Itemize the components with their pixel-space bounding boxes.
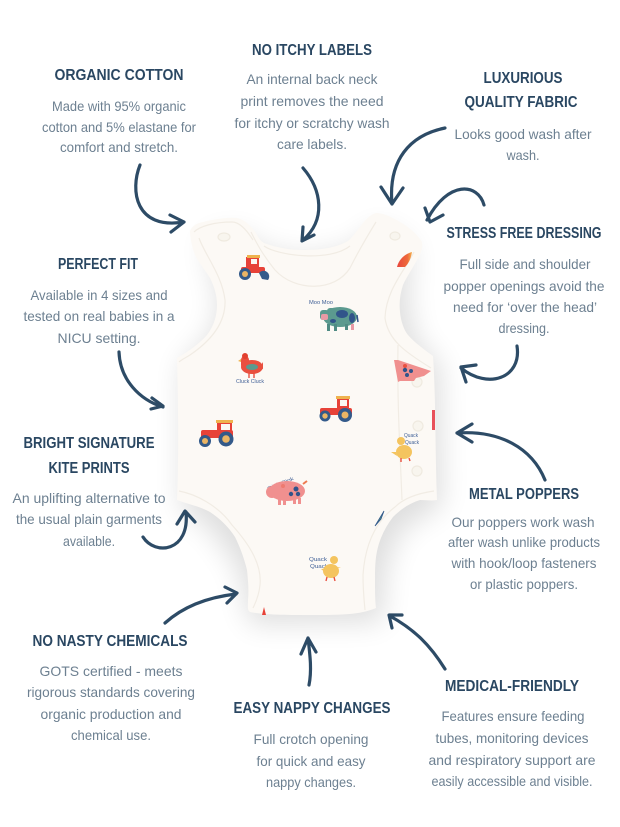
baby bodysuit garment: [177, 213, 442, 624]
block: no nasty chemicals: chemical use.: [71, 727, 151, 743]
arrow: stress free lower: [461, 346, 517, 382]
print: hen: Cluck Cluck: [236, 379, 265, 385]
block: luxurious quality fabric: QUALITY FABRIC: [464, 94, 578, 111]
block: medical-friendly: tubes, monitoring devices: [436, 730, 588, 746]
print: duck bottom: Quack: [309, 557, 328, 563]
block: no nasty chemicals: [27, 633, 195, 743]
print: duck right: Quack: [404, 433, 418, 439]
arrow: easy nappy changes: [301, 638, 316, 685]
print: cow: [309, 300, 358, 331]
block: organic cotton: ORGANIC COTTON: [54, 67, 184, 84]
block: metal poppers: or plastic poppers.: [470, 576, 578, 592]
block: metal poppers: after wash unlike products: [448, 534, 600, 550]
arrow: no itchy labels: [302, 168, 319, 241]
print: pig: Oink Oink: [267, 476, 295, 492]
print: tractor top left: [239, 255, 269, 280]
block: no nasty chemicals: GOTS certified - meets: [40, 663, 182, 679]
block: easy nappy changes: EASY NAPPY CHANGES: [234, 700, 391, 717]
block: metal poppers: Our poppers work wash: [452, 514, 594, 530]
block: medical-friendly: MEDICAL-FRIENDLY: [445, 678, 579, 695]
block: no itchy labels: NO ITCHY LABELS: [252, 42, 372, 59]
print: duck right: Quack: [405, 440, 419, 446]
print: kite edge right: [397, 252, 412, 267]
block: perfect fit: tested on real babies in a: [24, 308, 175, 324]
block: luxurious quality fabric: [454, 70, 592, 163]
block: organic cotton: Made with 95% organic: [52, 98, 186, 114]
block: organic cotton: cotton and 5% elastane for: [42, 119, 196, 135]
block: medical-friendly: [428, 678, 596, 789]
popper snaps: [218, 232, 423, 476]
block: bright signature kite prints: BRIGHT SIGNATURE: [24, 435, 155, 452]
arrow: perfect fit: [119, 352, 163, 409]
block: perfect fit: [24, 256, 175, 346]
block: medical-friendly: and respiratory support are: [428, 752, 596, 768]
block: stress free dressing: popper openings avoid the: [444, 278, 605, 294]
print: duck bottom: [309, 556, 341, 581]
block: no itchy labels: print removes the need: [240, 93, 384, 109]
arrow: organic cotton: [136, 165, 184, 232]
print: cow: Moo Moo: [309, 300, 333, 306]
block: no itchy labels: [234, 42, 390, 152]
print: duck right: [391, 433, 419, 462]
block: luxurious quality fabric: wash.: [506, 147, 540, 163]
block: easy nappy changes: Full crotch opening: [254, 731, 368, 747]
arrow: metal poppers: [457, 424, 545, 480]
arrow: bright signature: [143, 511, 195, 548]
block: organic cotton: [42, 67, 196, 155]
print: tractor left: [199, 420, 234, 447]
block: stress free dressing: [444, 225, 605, 336]
print: tractor centre: [320, 396, 352, 422]
print: hen: [236, 353, 265, 385]
block: luxurious quality fabric: Looks good wash after: [454, 126, 592, 142]
block: no itchy labels: care labels.: [277, 136, 347, 152]
block: medical-friendly: easily accessible and visible.: [432, 773, 592, 789]
block: easy nappy changes: nappy changes.: [266, 774, 356, 790]
block: medical-friendly: Features ensure feeding: [442, 708, 584, 724]
block: bright signature kite prints: KITE PRINTS: [48, 460, 130, 477]
arrow: medical-friendly: [389, 615, 445, 669]
block: metal poppers: [448, 486, 600, 592]
block: bright signature kite prints: the usual plain garments: [16, 511, 162, 527]
block: metal poppers: with hook/loop fasteners: [451, 555, 596, 571]
print: kite edge far right: [432, 410, 435, 430]
block: metal poppers: METAL POPPERS: [469, 486, 579, 503]
garment seams: [179, 222, 434, 610]
block: bright signature kite prints: available.: [63, 533, 115, 549]
block: easy nappy changes: [234, 700, 391, 790]
block: no nasty chemicals: organic production and: [40, 706, 182, 722]
print: duck bottom: Quack: [310, 564, 329, 570]
block: perfect fit: Available in 4 sizes and: [30, 287, 168, 303]
arrow: luxurious fabric: [381, 128, 445, 204]
block: bright signature kite prints: An uplifting alternative to: [12, 490, 166, 506]
block: no itchy labels: An internal back neck: [246, 71, 378, 87]
block: no nasty chemicals: rigorous standards covering: [27, 684, 195, 700]
arrow: no nasty chemicals: [165, 587, 237, 623]
print: pig: [266, 476, 307, 505]
print: edge fragments: [262, 511, 384, 615]
block: luxurious quality fabric: LUXURIOUS: [484, 70, 563, 87]
block: organic cotton: comfort and stretch.: [60, 139, 178, 155]
block: no nasty chemicals: NO NASTY CHEMICALS: [32, 633, 188, 650]
block: no itchy labels: for itchy or scratchy wash: [234, 115, 390, 131]
arrow: stress free upper: [425, 189, 484, 222]
block: stress free dressing: Full side and shoulder: [460, 256, 591, 272]
block: stress free dressing: need for ‘over the head’: [453, 299, 597, 315]
block: perfect fit: NICU setting.: [58, 330, 140, 346]
block: perfect fit: PERFECT FIT: [58, 256, 138, 273]
block: stress free dressing: dressing.: [498, 320, 550, 336]
print: pig edge right: [394, 360, 431, 382]
block: easy nappy changes: for quick and easy: [256, 753, 366, 769]
block: bright signature kite prints: [12, 435, 166, 549]
